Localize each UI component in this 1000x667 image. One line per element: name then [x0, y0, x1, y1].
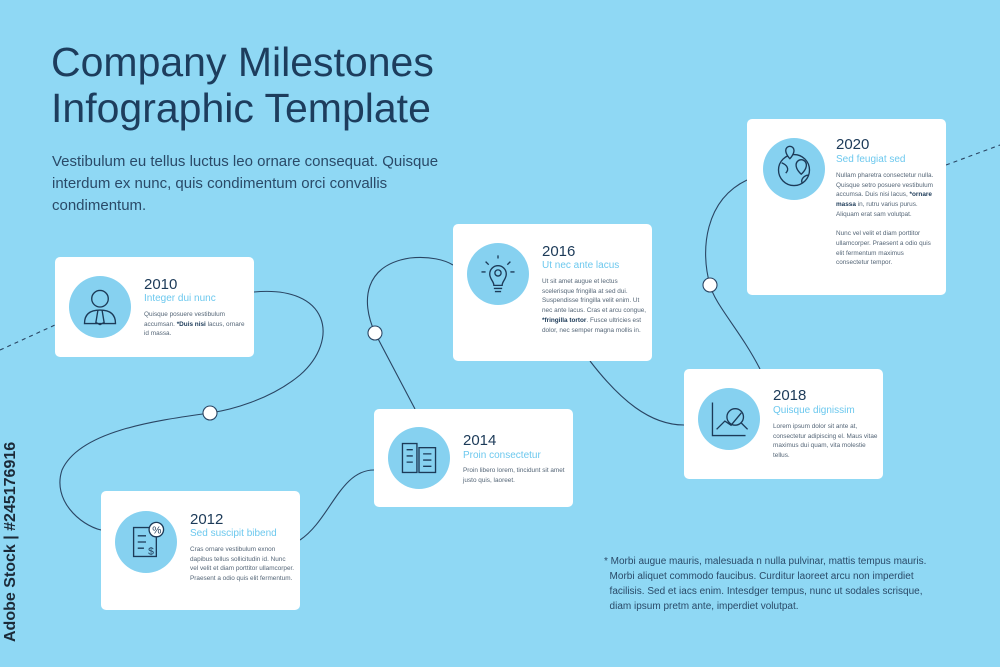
footnote: [604, 556, 926, 612]
card 2010: Quisque posuere vestibulum accumsan. *Duis nisi lacus, ornare id massa.: [144, 311, 245, 337]
card 2020: [747, 119, 946, 295]
card 2016: 2016: [542, 243, 575, 260]
card 2012: Cras ornare vestibulum exnon dapibus tellus sollicitudin id. Nunc vel velit et diam porttitor ullamcorper. Praesent a odio quis elit fermentum.: [190, 546, 294, 582]
card 2014: Proin consectetur: [463, 450, 541, 461]
footnote: facilisis. Sed et iacs enim. Intesdger tempus, nunc ut sodales scrisque,: [610, 586, 922, 597]
icon: globe pins: [763, 138, 825, 200]
card 2020: Nunc vel velit et diam porttitor ullamcorper. Praesent a odio quis elit fermentum maximus consectetur tempor.: [836, 230, 931, 266]
icon: document percent: $: [148, 546, 154, 557]
icon: document percent: [115, 511, 177, 573]
icon: buildings: [388, 427, 450, 489]
icon: document percent: %: [152, 526, 161, 537]
card 2012: [101, 491, 300, 610]
subtitle: Vestibulum eu tellus luctus leo ornare consequat. Quisque interdum ex nunc, quis condimentum orci convallis condimentum.: [52, 153, 438, 214]
watermark id: Adobe Stock | #245176916: [2, 442, 19, 642]
card 2010: 2010: [144, 276, 177, 293]
icon: light bulb: [467, 243, 529, 305]
title: [51, 39, 434, 131]
card 2020: Nullam pharetra consectetur nulla. Quisque setro posuere vestibulum accumsa. Duis nisi lacus, *ornare massa in, rutru varius purus. Aliquam erat sam volutpat.: [836, 172, 933, 218]
card 2010: [55, 257, 254, 357]
card 2016: Ut sit amet augue et lectus scelerisque fringilla at sed dui. Suspendisse fringilla velit enim. Ut nec ante lacus. Cras et arcu congue, *fringilla tortor. Fusce ultricies est dolor, nec semper magna mollis in.: [542, 278, 646, 334]
card 2012: Sed suscipit bibend: [190, 528, 277, 539]
card 2016: [453, 224, 652, 361]
card 2020: Sed feugiat sed: [836, 154, 906, 165]
card 2014: [374, 409, 573, 507]
title: Infographic Template: [51, 85, 431, 131]
card 2018: Lorem ipsum dolor sit ante at, consectetur adipiscing el. Maus vitae maximus dui quam, vita molestie tellus.: [773, 423, 877, 459]
title: Company Milestones: [51, 39, 434, 85]
card 2018: 2018: [773, 387, 806, 404]
card 2014: 2014: [463, 432, 496, 449]
card 2020: 2020: [836, 136, 869, 153]
card 2014: Proin libero lorem, tincidunt sit amet justo quis, laoreet.: [463, 467, 565, 484]
footnote: diam ipsum pretm ante, imperdiet volutpat.: [610, 601, 799, 612]
card 2018: Quisque dignissim: [773, 405, 855, 416]
icon: chart magnifier: [698, 388, 760, 450]
card 2012: 2012: [190, 511, 223, 528]
footnote: Morbi aliquet commodo faucibus. Curditur laoreet arcu non imperdiet: [610, 571, 914, 582]
card 2016: Ut nec ante lacus: [542, 260, 619, 271]
card 2010: Integer dui nunc: [144, 293, 216, 304]
card 2018: [684, 369, 883, 479]
icon: person: [69, 276, 131, 338]
footnote: * Morbi augue mauris, malesuada n nulla pulvinar, mattis tempus mauris.: [604, 556, 926, 567]
